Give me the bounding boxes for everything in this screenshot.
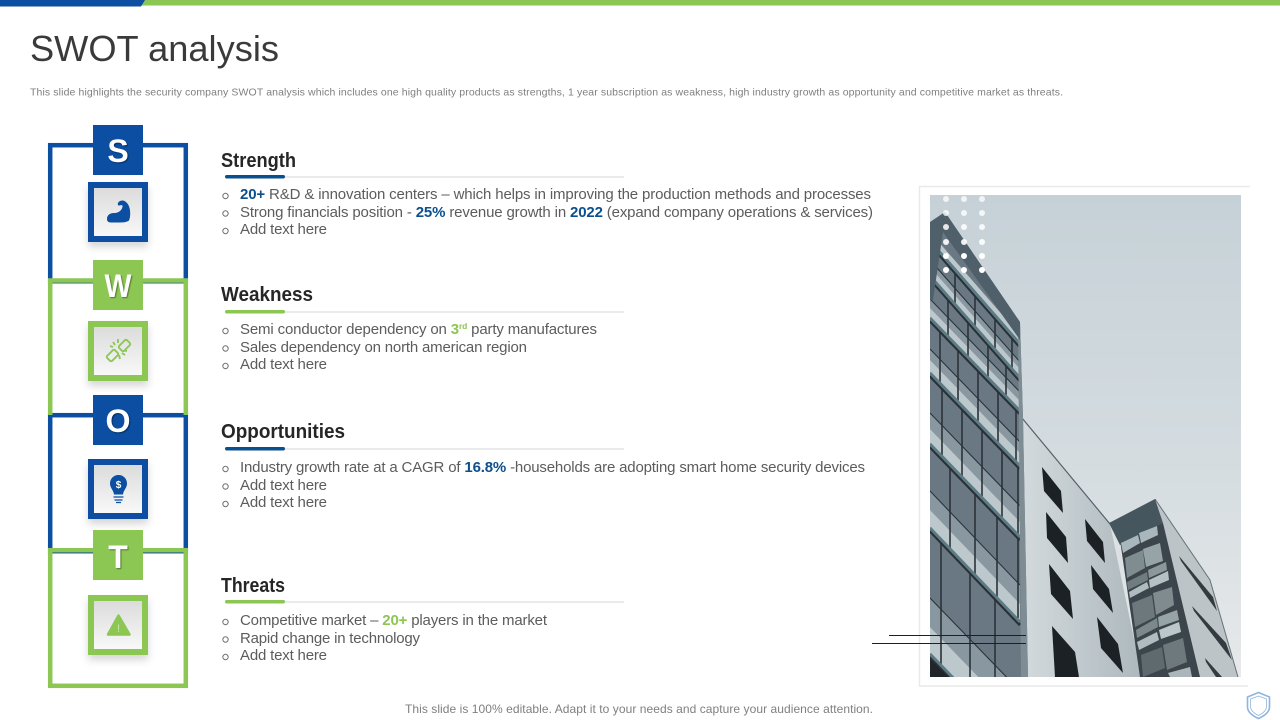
section: opportunities [221,421,865,511]
icon: flexed arm [91,185,145,239]
heading: threats: Threats [221,575,285,597]
photo: office building [925,195,1241,720]
bullet list: Strong financials position - 25% revenue growth in 2022 (expand company operations & services) [240,204,873,221]
title: SWOT analysis [30,28,279,69]
letter T: T [108,539,128,575]
section: threats [221,575,624,664]
dark gaps below floor bands [930,254,1021,677]
bullet list: Add text here [240,647,327,664]
letter W: W [104,268,132,304]
letter S [93,125,143,175]
bullet list [223,321,597,373]
bullet list: Competitive market – 20+ players in the market [240,612,548,629]
icon: shield logo [1248,692,1270,718]
mullions [939,274,1019,677]
bullet list [223,459,865,511]
footer note: This slide is 100% editable. Adapt it to your needs and capture your audience attention. [405,702,873,716]
heading rule [225,447,624,450]
frame: strength [50,145,186,281]
tower glass [930,212,1028,677]
SWOT letter column [50,125,186,686]
white facade [1026,446,1140,677]
frame: threats [50,550,186,686]
icon: warning triangle [91,598,145,652]
frame: opportunities [50,415,186,551]
icon: broken chain [91,324,145,378]
heading rule [225,310,624,314]
photo frame [920,186,1250,686]
bullet list: Add text here [240,221,327,238]
bullet list: Rapid change in technology [240,630,420,647]
bullet list: Semi conductor dependency on 3 [240,321,459,338]
letter O: O [106,403,130,439]
right wing front [1120,523,1200,677]
stray black lines [872,636,1026,644]
icon: warning triangle: ! [117,623,120,635]
bullet list: Add text here [240,477,327,494]
letter T [93,530,143,580]
frame: weakness [50,280,186,415]
bullet list: Industry growth rate at a CAGR of 16.8% -households are adopting smart home security devices [240,459,865,476]
floor rails [930,260,1020,691]
dot pattern [943,196,985,273]
bullet list: party manufactures [467,321,597,338]
bullet list: Add text here [240,494,327,511]
letter W [93,260,143,310]
bullet list [223,186,873,238]
top accent bar [0,0,1280,6]
teal floor bands [930,241,1020,720]
heading rule [225,600,624,604]
grey lower panels [930,270,1020,677]
right wing side face [1155,499,1238,677]
light strips [930,244,1020,677]
bullet list: 20+ R&D & innovation centers – which helps in improving the production methods and processes [240,186,871,203]
icon: idea bulb with dollar: $ [116,480,122,491]
icon: idea bulb with dollar [91,462,145,516]
heading: weakness: Weakness [221,284,313,306]
letter O [93,395,143,445]
bullet list: rd [459,321,467,331]
section: strength [221,150,873,238]
heading: strength: Strength [221,150,296,172]
letter S: S [107,133,129,169]
bullet list [223,612,548,664]
subtitle description: This slide highlights the security company SWOT analysis which includes one high quality products as strengths, 1 year subscription as weakness, high industry growth as opportunity and competitive market as threats. [30,86,1063,98]
heading: opportunities: Opportunities [221,421,345,443]
heading rule [225,175,624,178]
bullet list: Sales dependency on north american region [240,339,527,356]
section: weakness [221,284,624,373]
bullet list: Add text here [240,356,327,373]
facade windows [1042,467,1123,677]
